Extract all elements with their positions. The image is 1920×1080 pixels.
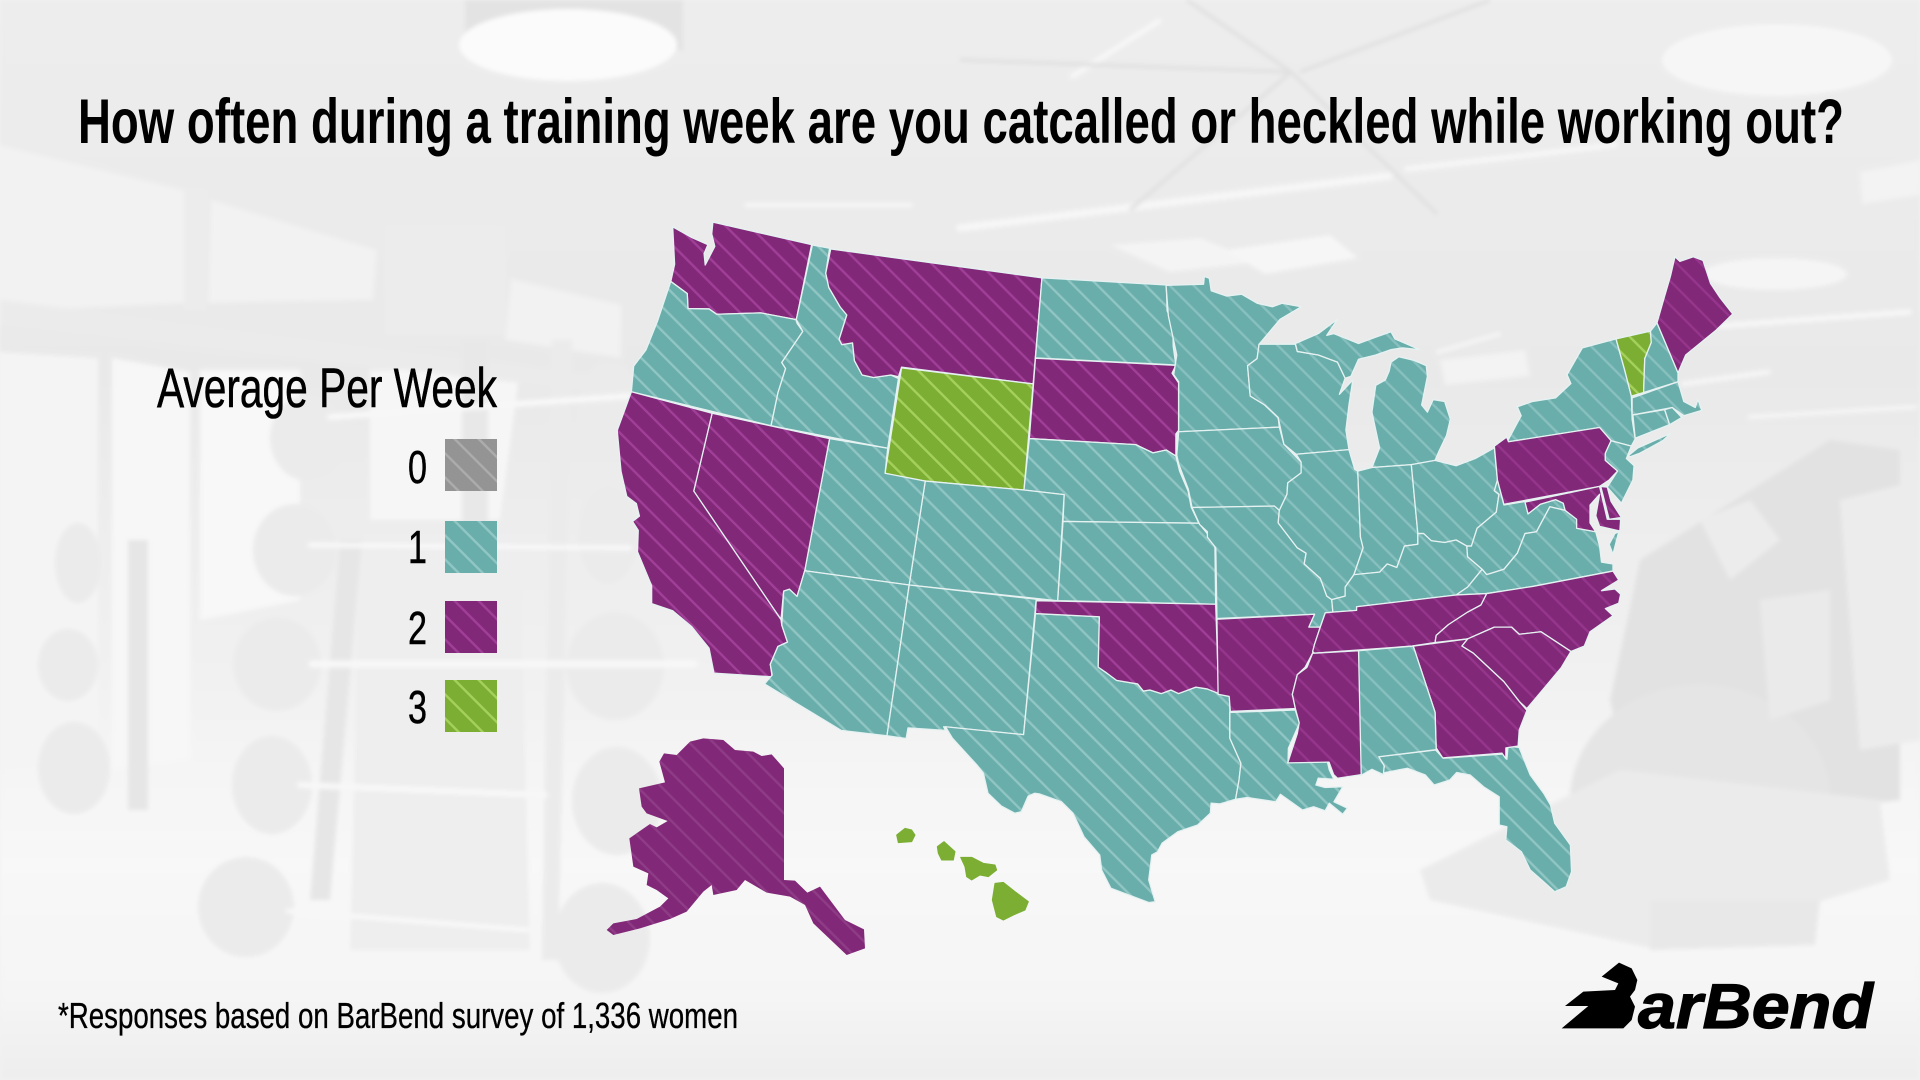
state: Texas xyxy=(946,614,1241,902)
state: Nevada xyxy=(694,413,830,620)
state: Rhode Island xyxy=(1665,407,1682,425)
state: Kentucky xyxy=(1332,534,1482,612)
legend item: 1 xyxy=(408,521,497,573)
state: Massachusetts xyxy=(1632,382,1702,416)
state: Iowa xyxy=(1177,427,1301,510)
state: Ohio xyxy=(1411,448,1499,546)
state: Missouri xyxy=(1192,506,1333,627)
state: Florida xyxy=(1379,746,1572,892)
state: Virginia eastern shore xyxy=(1609,532,1619,554)
legend item: 0 xyxy=(408,439,497,493)
state: Utah xyxy=(805,439,925,585)
state: Pennsylvania xyxy=(1494,427,1618,504)
state: Maryland xyxy=(1525,486,1621,532)
state: Arkansas xyxy=(1217,614,1320,711)
state: North Dakota xyxy=(1035,278,1176,365)
state: Washington xyxy=(671,222,812,320)
state: Connecticut xyxy=(1633,410,1670,438)
legend item: 0: 0 xyxy=(408,441,427,493)
legend item: 3: 3 xyxy=(408,681,427,733)
footnote: *Responses based on BarBend survey of 1,336 women xyxy=(58,995,738,1036)
legend item: 1: 1 xyxy=(408,521,427,573)
state: New Hampshire xyxy=(1644,323,1678,392)
logo mark xyxy=(1562,963,1637,1028)
state: Idaho xyxy=(771,245,898,448)
logo: BarBend xyxy=(1562,963,1875,1042)
state: New Jersey xyxy=(1605,441,1634,503)
state: Mississippi xyxy=(1288,651,1361,778)
legend item: 2 xyxy=(408,601,497,654)
state: Nebraska xyxy=(1024,439,1199,523)
state: Maine xyxy=(1657,257,1733,373)
state: Wyoming xyxy=(885,368,1033,490)
state: New Mexico xyxy=(887,585,1036,739)
logo wordmark: arBend xyxy=(1638,972,1875,1042)
state: Long Island xyxy=(1628,434,1670,457)
state: New York xyxy=(1508,339,1635,446)
state: Oklahoma xyxy=(1035,601,1219,694)
state: Wisconsin xyxy=(1248,344,1353,454)
legend heading: Average Per Week xyxy=(157,356,498,419)
state: Oregon xyxy=(631,281,803,426)
gym machine on the right xyxy=(1420,440,1920,950)
state: Michigan lower peninsula xyxy=(1372,357,1450,467)
state: Arizona xyxy=(765,571,909,736)
state: California xyxy=(617,392,787,677)
state: Tennessee xyxy=(1313,594,1487,653)
state: Indiana xyxy=(1354,465,1418,575)
state: Illinois xyxy=(1278,450,1363,600)
legend xyxy=(157,356,498,733)
state: Hawaii xyxy=(897,828,1028,920)
state: Alabama xyxy=(1359,646,1436,776)
US choropleth map: contiguous states xyxy=(617,222,1733,902)
state: North Carolina xyxy=(1435,571,1621,651)
state: West Virginia xyxy=(1467,480,1565,575)
state: Alaska xyxy=(607,738,865,955)
state: Louisiana xyxy=(1230,710,1347,814)
ceiling lights xyxy=(459,0,1920,385)
state: Minnesota xyxy=(1166,276,1301,432)
state: Colorado xyxy=(909,481,1064,601)
state: Michigan upper peninsula xyxy=(1295,319,1420,378)
legend item: 3 xyxy=(408,680,497,733)
state: Kansas xyxy=(1058,521,1216,604)
legend item: 2: 2 xyxy=(408,602,427,654)
state: Virginia xyxy=(1456,507,1613,595)
state: Vermont xyxy=(1616,331,1651,396)
state: Montana xyxy=(826,249,1042,384)
state: Georgia xyxy=(1413,639,1527,759)
state: South Carolina xyxy=(1462,627,1571,709)
eastern states xyxy=(1166,257,1733,778)
state: Delaware xyxy=(1601,486,1621,519)
state: South Dakota xyxy=(1029,358,1179,456)
